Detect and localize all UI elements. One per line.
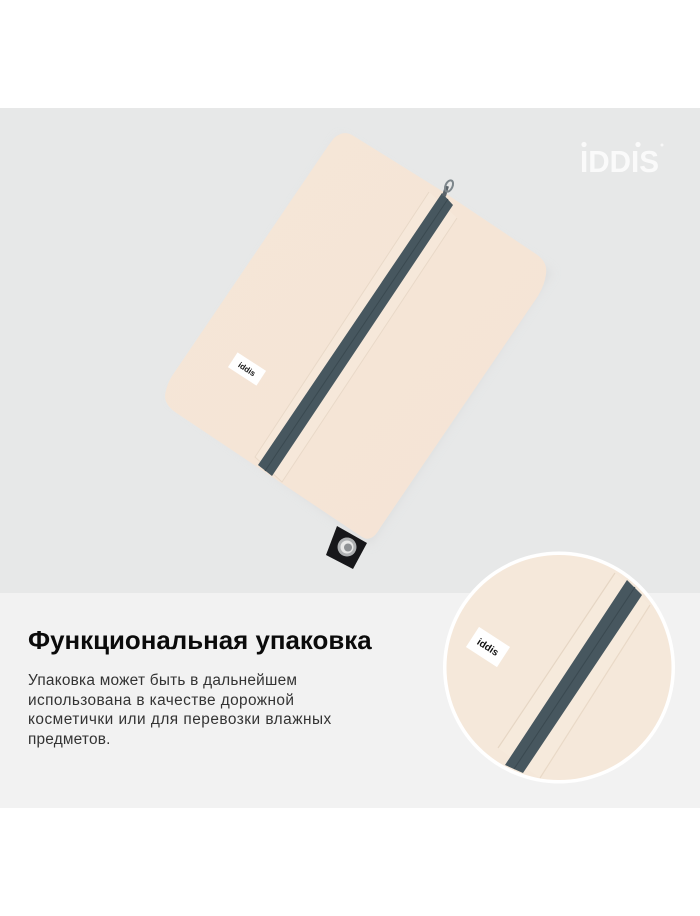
title: Функциональная упаковка	[28, 627, 372, 655]
description text: Упаковка может быть в дальнейшем	[28, 672, 297, 689]
brand label: iddis	[475, 637, 501, 659]
description text	[28, 672, 332, 748]
zipper centre line	[265, 199, 448, 471]
pouch body	[165, 133, 546, 539]
artwork: pouch and detail circle	[165, 133, 675, 784]
brand label	[466, 627, 510, 667]
flap seam	[255, 192, 457, 482]
description text: использована в качестве дорожной	[28, 692, 294, 709]
brand label	[228, 352, 266, 386]
zipper pull	[443, 179, 455, 196]
zipper	[505, 580, 642, 773]
description text: предметов.	[28, 731, 111, 748]
description text: косметички или для перевозки влажных	[28, 711, 332, 728]
panel: photo background	[0, 108, 700, 593]
panel: text background	[0, 593, 700, 808]
shadow: pouch	[170, 136, 552, 545]
seam panel	[498, 573, 650, 778]
zipper tape	[258, 193, 453, 476]
tag: black loop with eyelet	[326, 526, 367, 569]
logo: iddis: IDDIS	[580, 144, 659, 179]
detail circle	[443, 552, 675, 784]
brand label: iddis	[236, 361, 257, 379]
